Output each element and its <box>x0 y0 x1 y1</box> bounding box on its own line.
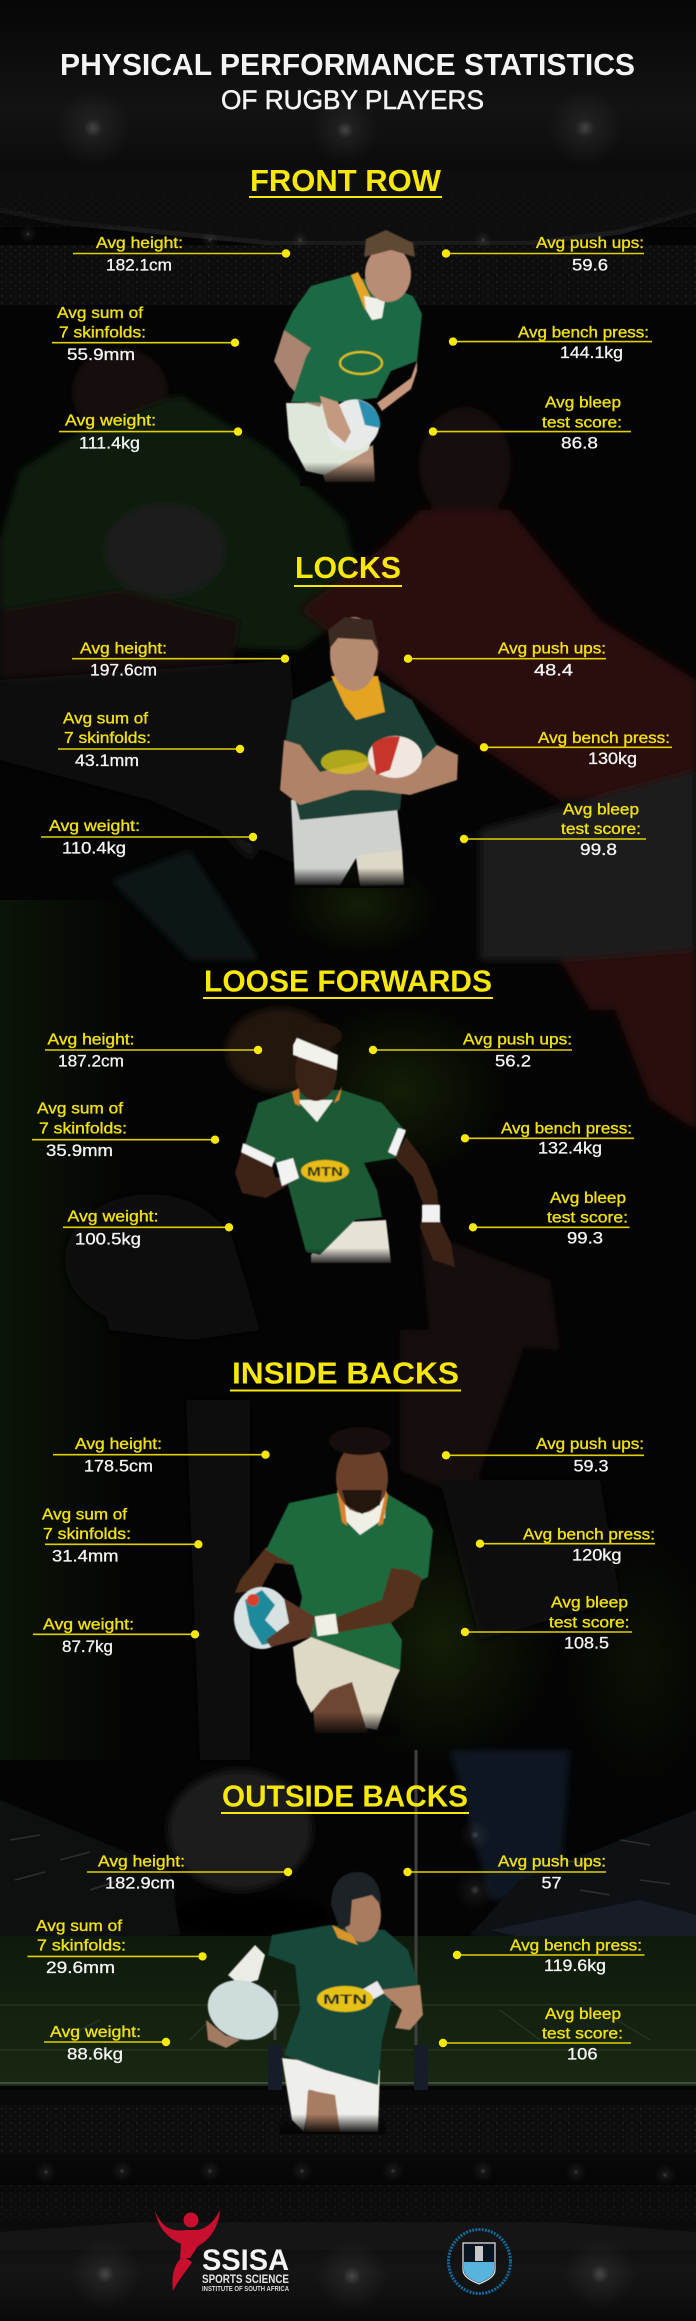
stat: avg push ups: Avg push ups: <box>498 1854 606 1870</box>
heading: loose forwards: LOOSE FORWARDS <box>204 963 492 998</box>
stat: avg bleep test: 86.8 <box>561 434 598 452</box>
stat: avg bleep test <box>429 395 631 452</box>
background: ghost boots and black jersey player <box>65 1008 620 1760</box>
stat: avg push ups <box>403 1854 606 1892</box>
fade: outside backs legs <box>280 2114 385 2134</box>
stat: avg bleep test: test score: <box>542 414 622 431</box>
panel: inside backs <box>33 1355 655 1736</box>
stat: avg bleep test: Avg bleep <box>545 2006 621 2023</box>
stat: avg skinfolds: Avg sum of <box>36 1918 123 1935</box>
stat: avg bleep test: 106 <box>567 2045 598 2063</box>
stat: avg weight: 100.5kg <box>75 1230 141 1248</box>
stat: avg bleep test: Avg bleep <box>551 1595 628 1612</box>
stat: avg bench press: Avg bench press: <box>523 1526 655 1543</box>
stat: avg skinfolds <box>52 305 239 364</box>
title: OF RUGBY PLAYERS <box>221 85 484 115</box>
stat: avg push ups: 48.4 <box>534 661 573 679</box>
stat: avg push ups <box>442 1436 644 1476</box>
fade: inside backs legs <box>290 1712 400 1736</box>
stat: avg height: Avg height: <box>96 235 183 252</box>
stat: avg weight: Avg weight: <box>68 1208 158 1225</box>
stat: avg skinfolds: 7 skinfolds: <box>39 1120 127 1137</box>
background: ghost player springbok left <box>0 348 365 700</box>
stat: avg height <box>45 1031 262 1070</box>
stat: avg height: Avg height: <box>48 1031 134 1048</box>
stat: avg bench press: Avg bench press: <box>538 730 670 747</box>
stat: avg bleep test: Avg bleep <box>563 801 639 818</box>
stat: avg push ups: 56.2 <box>495 1052 531 1070</box>
stat: avg height <box>53 1436 270 1476</box>
stat: avg bleep test: Avg bleep <box>550 1190 626 1207</box>
stat: avg skinfolds: 35.9mm <box>46 1142 113 1160</box>
stat: avg bench press: 144.1kg <box>560 344 623 362</box>
stat: avg skinfolds: 7 skinfolds: <box>59 324 146 341</box>
stat: avg push ups: Avg push ups: <box>536 235 644 252</box>
stat: avg skinfolds: 7 skinfolds: <box>64 730 151 747</box>
icon: red figure <box>155 2210 220 2291</box>
stat: avg height: 197.6cm <box>90 661 157 679</box>
stat: avg height: 187.2cm <box>58 1052 124 1070</box>
stat: avg push ups <box>442 235 644 275</box>
stat: avg skinfolds <box>28 1918 207 1977</box>
stat: avg bleep test <box>439 2006 631 2063</box>
stat: avg height <box>73 235 290 275</box>
stat: avg bench press <box>449 324 652 362</box>
stat: avg weight <box>59 412 242 452</box>
stat: avg height: Avg height: <box>75 1436 162 1453</box>
stat: avg bench press <box>453 1938 644 1975</box>
stat: avg bench press: Avg bench press: <box>510 1938 642 1955</box>
stat: avg bleep test <box>460 801 646 859</box>
heading: front row: FRONT ROW <box>250 163 442 198</box>
stat: avg bench press: 120kg <box>572 1546 622 1564</box>
logo: SSISA: SPORTS SCIENCE <box>202 2272 289 2286</box>
stat: avg weight: 111.4kg <box>79 434 140 452</box>
stat: avg weight: 88.6kg <box>67 2045 123 2063</box>
background: pitch with goal posts <box>0 1750 696 2097</box>
stat: avg height: 182.9cm <box>105 1874 175 1892</box>
panel: locks <box>41 550 672 888</box>
stat: avg bench press: 119.6kg <box>544 1957 606 1975</box>
stat: avg skinfolds: 31.4mm <box>52 1548 118 1566</box>
logo: university crest <box>448 2230 510 2294</box>
stat: avg skinfolds: 29.6mm <box>46 1959 115 1977</box>
player: front row <box>274 230 422 482</box>
player: outside backs: MTN <box>323 1991 367 2007</box>
title: PHYSICAL PERFORMANCE STATISTICS <box>60 47 635 82</box>
stat: avg skinfolds: Avg sum of <box>42 1506 128 1523</box>
stat: avg skinfolds: Avg sum of <box>63 710 149 727</box>
stat: avg push ups: Avg push ups: <box>536 1436 644 1453</box>
stat: avg weight <box>63 1208 233 1248</box>
stat: avg weight: Avg weight: <box>65 412 156 430</box>
stat: avg skinfolds: 55.9mm <box>67 346 135 364</box>
background: ghost player red jersey right <box>0 407 696 1130</box>
panel: outside backs <box>28 1778 644 2134</box>
stat: avg bleep test: Avg bleep <box>545 395 621 412</box>
stat: avg weight: Avg weight: <box>49 818 140 835</box>
stat: avg bleep test: 99.8 <box>580 841 617 859</box>
stat: avg skinfolds: 7 skinfolds: <box>37 1938 126 1955</box>
heading: inside backs: INSIDE BACKS <box>232 1355 459 1390</box>
background: ghost ball and boot near outside backs <box>168 1750 570 1935</box>
background: faint green field glow <box>0 855 696 1790</box>
stat: avg bench press: 130kg <box>588 750 637 768</box>
stat: avg bleep test: test score: <box>561 821 641 838</box>
stat: avg bleep test: test score: <box>549 1614 630 1631</box>
stat: avg skinfolds: Avg sum of <box>37 1101 124 1118</box>
stat: avg skinfolds <box>32 1101 219 1160</box>
background: stadium roof and crowd at top <box>0 0 696 325</box>
player: loose forwards <box>235 1023 455 1267</box>
fade: loose forwards shorts <box>300 1248 400 1266</box>
player: outside backs <box>199 1872 423 2132</box>
stat: avg push ups: Avg push ups: <box>498 641 606 658</box>
stat: avg push ups: 59.3 <box>574 1458 608 1476</box>
stat: avg height: Avg height: <box>98 1854 185 1870</box>
stat: avg bleep test <box>461 1595 632 1653</box>
stat: avg bench press: Avg bench press: <box>518 324 649 341</box>
stat: avg push ups <box>369 1031 572 1070</box>
fade: front row legs <box>300 462 390 486</box>
logo: SSISA: SSISA <box>202 2244 289 2277</box>
stat: avg push ups <box>404 641 606 679</box>
stat: avg height <box>72 641 289 679</box>
stat: avg height: Avg height: <box>80 641 167 658</box>
stat: avg weight: 87.7kg <box>62 1638 113 1656</box>
stat: avg height <box>87 1854 292 1892</box>
stat: avg bench press <box>461 1120 634 1158</box>
stat: avg weight: 110.4kg <box>62 840 126 858</box>
stat: avg weight <box>44 2024 170 2063</box>
stat: avg bleep test: 99.3 <box>567 1230 603 1248</box>
stat: avg bench press: Avg bench press: <box>501 1120 632 1137</box>
logo: SSISA <box>155 2210 289 2293</box>
stat: avg weight <box>33 1616 199 1656</box>
player: inside backs <box>234 1427 433 1733</box>
stat: avg skinfolds: 43.1mm <box>75 752 139 770</box>
title <box>60 47 635 115</box>
fade: locks legs <box>285 868 410 888</box>
background: crowd and lights at bottom <box>0 2090 696 2321</box>
stat: avg push ups: 57 <box>542 1874 562 1892</box>
stat: avg bleep test: 108.5 <box>564 1635 609 1653</box>
stat: avg weight <box>41 818 257 858</box>
stat: avg bleep test: test score: <box>547 1210 628 1227</box>
panel: loose forwards <box>32 963 634 1267</box>
stat: avg skinfolds <box>42 1506 203 1566</box>
stat: avg height: 178.5cm <box>84 1458 153 1476</box>
stat: avg bench press: 132.4kg <box>538 1140 602 1158</box>
stat: avg skinfolds: 7 skinfolds: <box>43 1526 131 1543</box>
stat: avg weight: Avg weight: <box>43 1616 134 1633</box>
stat: avg bleep test: test score: <box>542 2026 623 2043</box>
stat: avg bleep test <box>469 1190 630 1248</box>
panel: front row <box>52 163 652 486</box>
stat: avg skinfolds: Avg sum of <box>57 305 144 322</box>
stat: avg bench press <box>480 730 672 768</box>
stat: avg height: 182.1cm <box>106 257 172 275</box>
heading: outside backs: OUTSIDE BACKS <box>222 1778 468 1813</box>
stat: avg push ups: Avg push ups: <box>463 1031 572 1048</box>
stat: avg bench press <box>476 1526 655 1564</box>
stat: avg skinfolds <box>58 710 244 770</box>
logo: SSISA: INSTITUTE OF SOUTH AFRICA <box>202 2286 289 2293</box>
stat: avg weight: Avg weight: <box>50 2024 141 2041</box>
player: loose forwards: MTN <box>307 1164 343 1179</box>
background: stadium stands <box>0 1800 696 1985</box>
heading: locks: LOCKS <box>295 550 401 585</box>
player: locks <box>280 617 458 886</box>
stat: avg push ups: 59.6 <box>572 257 608 275</box>
